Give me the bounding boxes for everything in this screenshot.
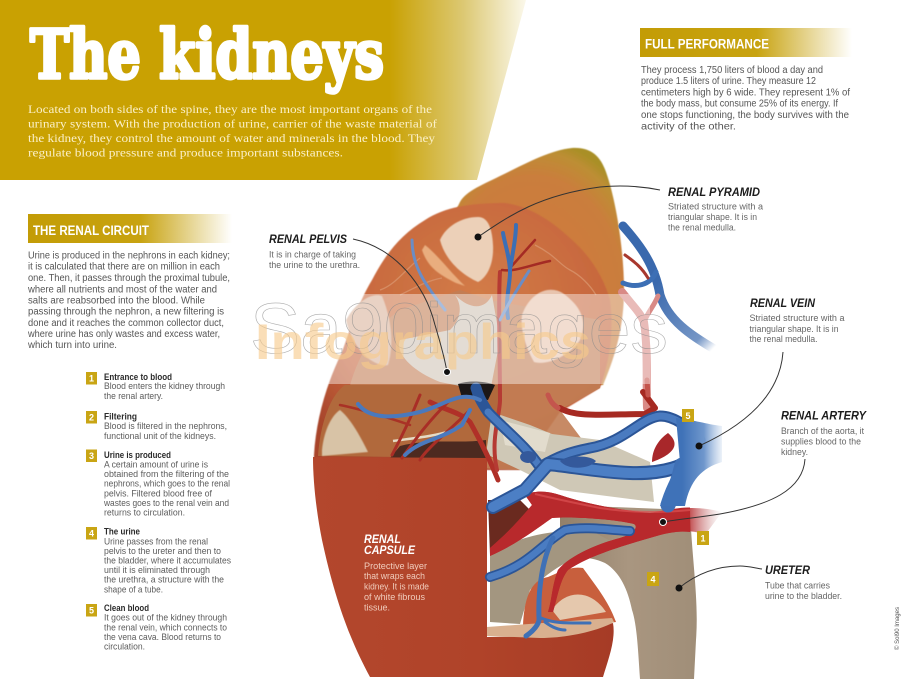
image credit: © Sol90 Images <box>894 607 901 650</box>
upper kidney arteries <box>340 240 655 480</box>
renal circuit text: where all nutrients and most of the water and <box>27 284 217 295</box>
step 5: clean blood <box>86 603 227 652</box>
renal cortex <box>314 203 612 470</box>
renal circuit text: which turn into urine. <box>27 340 117 351</box>
cortex detail lines <box>380 245 596 295</box>
step 3: urine is produced <box>86 450 230 518</box>
badge 1: 1 <box>700 534 706 544</box>
label: renal capsule: CAPSULE <box>364 543 416 557</box>
watermark text: Infographics <box>255 314 591 370</box>
label: renal vein: RENAL VEIN <box>750 296 815 310</box>
label: renal capsule: Protective layer <box>364 561 427 571</box>
badge 4: 4 <box>650 574 656 584</box>
heading: full performance: FULL PERFORMANCE <box>645 36 769 52</box>
capsule ledge highlight <box>487 618 614 638</box>
intro text: regulate blood pressure and produce important substances. <box>28 148 343 160</box>
central tissue and tan bands <box>390 412 654 624</box>
step 5: clean blood: 5 <box>89 606 94 616</box>
watermark band <box>310 294 650 384</box>
full performance text: They process 1,750 liters of blood a day and <box>641 65 823 76</box>
full performance text: one stops functioning, the body survives with the <box>641 110 849 121</box>
step 5: clean blood: It goes out of the kidney through <box>104 613 227 623</box>
renal circuit text <box>27 250 230 351</box>
step 3: urine is produced: Urine is produced <box>104 450 171 460</box>
step 5: clean blood: the vena cava. Blood returns to <box>104 632 221 642</box>
renal artery <box>490 492 722 612</box>
upper right vessels behind kidney <box>622 226 716 408</box>
leader: renal pyramid <box>474 186 660 240</box>
renal circuit text: passing through the nephron, a new filtering is <box>28 307 224 318</box>
step 4: the urine: the urethra, a structure with the <box>104 575 224 585</box>
step 5: clean blood: circulation. <box>104 642 145 652</box>
label: renal pelvis: RENAL PELVIS <box>269 232 347 246</box>
badge 5 <box>682 409 694 422</box>
step 1: entrance to blood: Blood enters the kidney through <box>104 381 225 391</box>
step 4: the urine: until it is eliminated through <box>104 565 210 575</box>
full performance text: activity of the other. <box>641 121 736 132</box>
renal circuit text: done and it reaches the common collector duct, <box>28 318 224 329</box>
step 1: entrance to blood <box>86 372 225 401</box>
intro text: urinary system. With the production of urine, carrier of the waste material of <box>28 118 437 130</box>
step 3: urine is produced: nephrons, which goes to the renal <box>104 479 230 489</box>
label: renal pelvis: the urine to the urethra. <box>269 260 360 270</box>
label: renal vein: Striated structure with a <box>750 313 844 323</box>
label: renal artery: supplies blood to the <box>781 436 861 446</box>
step 4: the urine <box>86 526 232 594</box>
step 2: filtering: Filtering <box>104 412 137 422</box>
badge 5: 5 <box>685 411 691 421</box>
step 4: the urine: shape of a tube. <box>104 584 163 594</box>
intro text: the kidney, they control the amount of water and minerals in the blood. They <box>28 133 435 145</box>
label: renal capsule <box>364 532 429 612</box>
title banner <box>0 0 526 180</box>
label: renal capsule: RENAL <box>364 532 401 546</box>
renal circuit text: salts are reabsorbed into the blood. While <box>28 296 205 306</box>
step 3: urine is produced: obtained from the filtering of the <box>104 469 229 479</box>
step 2: filtering: functional unit of the kidneys. <box>104 431 216 441</box>
leader lines <box>353 186 805 592</box>
full performance text: produce 1.5 liters of urine. They measure 12 <box>641 76 816 87</box>
vein exit fading <box>660 418 722 506</box>
label: renal artery: Branch of the aorta, it <box>781 426 864 436</box>
intro text: Located on both sides of the spine, they are the most important organs of the <box>28 104 432 116</box>
step 4: the urine: Urine passes from the renal <box>104 536 208 546</box>
renal circuit text: where urine has only wastes and excess water, <box>27 329 220 340</box>
renal ureter <box>560 505 697 679</box>
renal capsule block <box>313 457 614 677</box>
label: renal pyramid <box>668 185 763 232</box>
label: renal vein: the renal medulla. <box>750 334 818 344</box>
outer fat layer <box>440 148 624 385</box>
step 4: the urine: the bladder, where it accumulates <box>104 556 232 566</box>
leader: renal pelvis <box>353 239 450 376</box>
label: renal pyramid: RENAL PYRAMID <box>668 185 760 199</box>
label: renal artery: kidney. <box>781 447 808 457</box>
badge 1 <box>697 531 709 545</box>
step 3: urine is produced: A certain amount of urine is <box>104 460 209 470</box>
step 1: entrance to blood: 1 <box>89 374 94 384</box>
step 2: filtering: 2 <box>89 412 94 422</box>
label: renal pyramid: the renal medulla. <box>668 222 736 232</box>
label: renal capsule: that wraps each <box>364 571 425 581</box>
label: renal capsule: kidney. It is made <box>364 582 429 592</box>
label: ureter: Tube that carries <box>765 580 830 590</box>
grey central pelvis <box>399 295 500 400</box>
step 1: entrance to blood: the renal artery. <box>104 391 163 401</box>
label: renal artery <box>781 408 867 457</box>
renal vein <box>358 225 700 636</box>
label: renal pyramid: Striated structure with a <box>668 202 763 212</box>
full performance text: centimeters high by 6 wide. They represent 1% of <box>641 88 850 98</box>
label: ureter: urine to the bladder. <box>765 591 842 601</box>
lower pyramid <box>552 594 606 620</box>
step 3: urine is produced: 3 <box>89 451 94 461</box>
label: renal pelvis <box>269 232 360 270</box>
panel: full performance <box>640 28 852 132</box>
step 5: clean blood: the renal vein, which connects to <box>104 622 227 632</box>
label: renal pyramid: triangular shape. It is in <box>668 212 757 222</box>
renal circuit text: it is calculated that there are on million in each <box>28 262 220 273</box>
inner kidney tissue <box>345 290 600 470</box>
step 4: the urine: The urine <box>104 526 140 536</box>
renal pyramids <box>322 217 583 456</box>
badge 4 <box>647 572 659 586</box>
red vessel chunk <box>652 433 675 462</box>
vein junction ovals <box>520 451 596 468</box>
number badges <box>647 409 709 586</box>
heading: the renal circuit: THE RENAL CIRCUIT <box>33 223 150 238</box>
renal circuit text: one. Then, it passes through the proximal tubule, <box>28 273 230 284</box>
step 4: the urine: 4 <box>89 528 94 538</box>
intro text <box>28 104 437 160</box>
step 1: entrance to blood: Entrance to blood <box>104 372 172 382</box>
kidney illustration <box>250 148 722 679</box>
leader: renal vein <box>696 352 783 450</box>
full performance text: the body mass, but consume 25% of its energy. If <box>641 99 838 110</box>
title: The kidneys <box>30 15 384 94</box>
label: renal capsule: of white fibrous <box>364 592 426 602</box>
label: renal capsule: tissue. <box>364 602 390 612</box>
heading: full performance <box>640 28 852 57</box>
step 3: urine is produced: wastes goes to the renal vein and <box>103 498 229 508</box>
lower renal section <box>523 568 616 632</box>
panel: the renal circuit <box>27 214 232 351</box>
step 3: urine is produced: returns to circulation. <box>104 508 185 518</box>
label: renal vein <box>750 296 844 344</box>
watermark text: Sa90images <box>250 290 668 369</box>
lower left sinus <box>318 385 500 458</box>
leader: ureter <box>676 566 762 592</box>
step 5: clean blood: Clean blood <box>104 603 149 613</box>
step 3: urine is produced: pelvis. Filtered blood free of <box>104 488 213 498</box>
step 4: the urine: pelvis to the ureter and then to <box>104 546 221 556</box>
renal circuit text: Urine is produced in the nephrons in each kidney; <box>28 250 230 262</box>
label: renal vein: triangular shape. It is in <box>750 324 838 334</box>
step 2: filtering: Blood is filtered in the nephrons, <box>104 421 227 431</box>
heading: the renal circuit <box>28 214 232 243</box>
step list <box>86 372 232 652</box>
label: renal artery: RENAL ARTERY <box>781 408 867 422</box>
leader: renal artery <box>660 459 805 526</box>
label: ureter <box>765 563 842 601</box>
label: ureter: URETER <box>765 563 810 577</box>
full performance text <box>641 65 850 132</box>
step 2: filtering <box>86 411 227 441</box>
label: renal pelvis: It is in charge of taking <box>269 250 356 260</box>
